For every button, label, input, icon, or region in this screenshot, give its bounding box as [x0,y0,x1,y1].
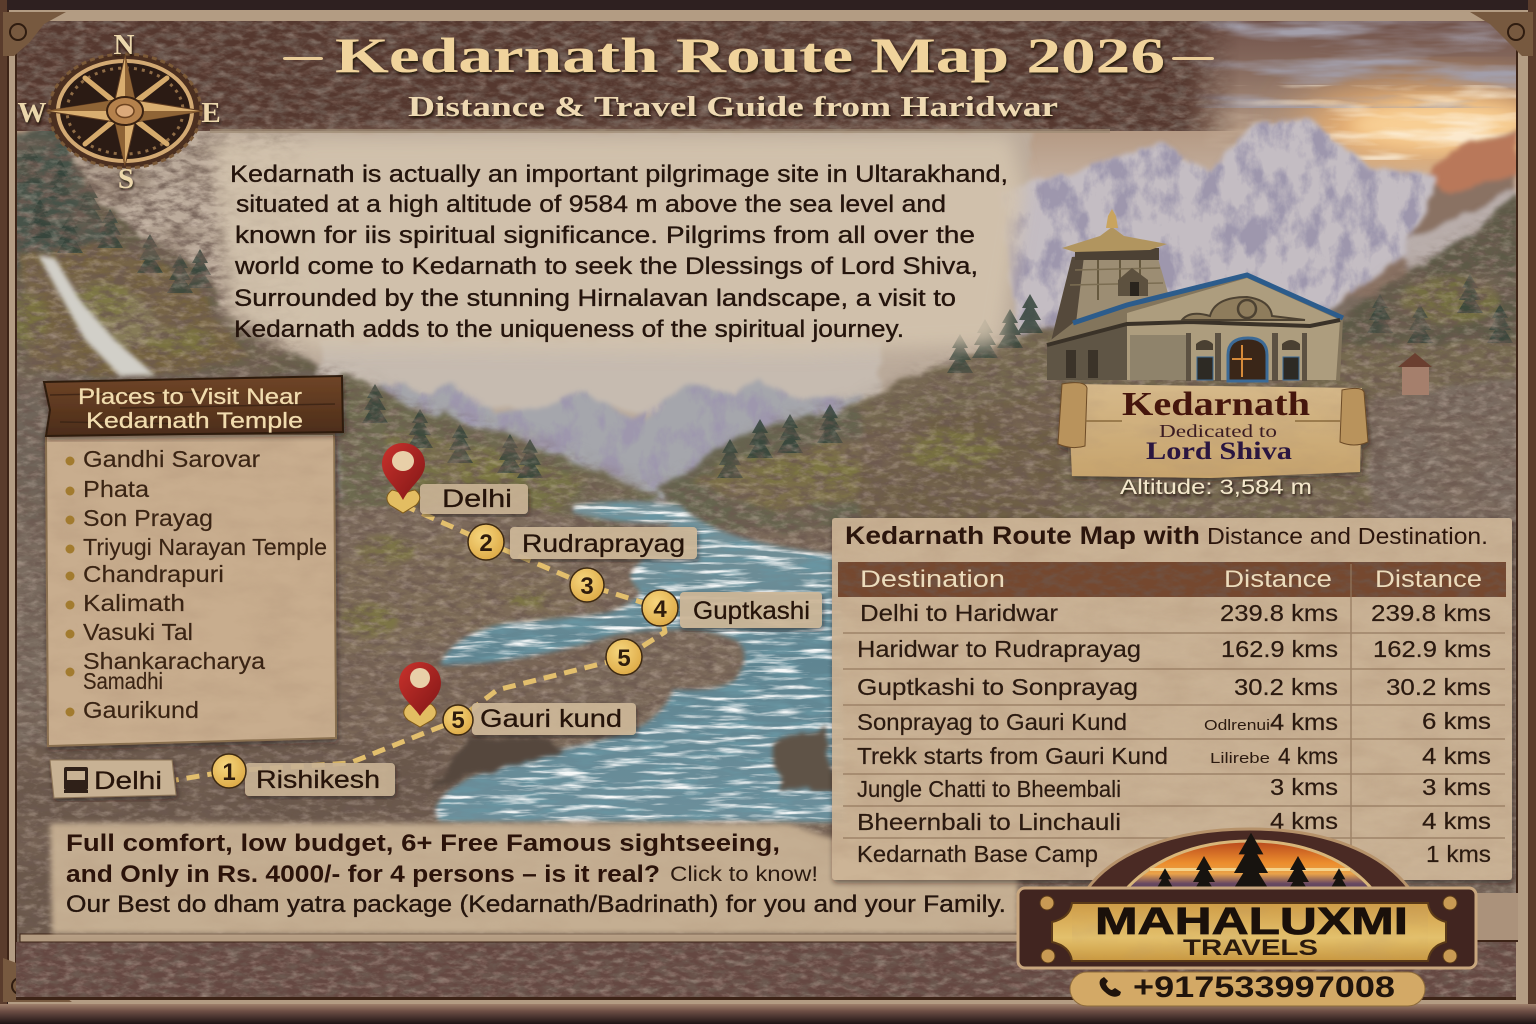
pale haze [0,130,1030,420]
table header row [838,562,1506,597]
left dark forest [17,147,320,416]
table rows: Lilirebe [1210,750,1270,767]
text block: intro paragraph: world come to Kedarnath to seek the Dlessings of Lord Shiva, [234,253,978,280]
compass letters: S [118,163,134,195]
banner: Kedarnath scroll: Lord Shiva [1146,438,1293,465]
table rows: Bheernbali to Linchauli [857,809,1121,835]
panel: promotional text: Click to know! [670,863,818,886]
table heading: Kedarnath Route Map with [845,522,1200,550]
table rows: 4 kms [1270,709,1338,735]
compass letters: E [201,97,221,129]
route stop markers: 1 [222,759,236,786]
map label: Guptkashi: Guptkashi [693,597,810,625]
icon: red map pin Gaurikund [399,662,441,727]
bank [338,510,831,560]
table rows: 3 kms [1270,774,1338,800]
river [420,495,850,830]
land texture [14,130,1522,950]
list items: Chandrapuri [83,561,224,587]
panel: places to visit list [46,434,336,746]
phone pill [1070,971,1425,1006]
map label: Guptkashi [680,592,822,628]
map label: Gauri kund [472,703,636,735]
list items: Vasuki Tal [83,619,193,645]
route line [176,505,665,780]
logo plaque: MAHALUXMI [1095,901,1408,943]
table rows: 1 kms [1426,841,1491,867]
table rows: 30.2 kms [1234,674,1338,700]
table rows: 4 kms [1422,743,1491,769]
panel: promotional text: and Only in Rs. 4000/- for 4 persons – is it real? [66,861,660,888]
subtitle: Distance & Travel Guide from Haridwar [408,92,1058,123]
table rows: Odlrenui [1204,717,1270,734]
table rows: Jungle Chatti to Bheembali [857,776,1121,802]
text block: intro paragraph: Surrounded by the stunning Hirnalavan landscape, a visit to [234,285,956,312]
icon: red map pin Delhi [382,443,425,513]
table header row: Distance [1224,566,1332,593]
table rows: Haridwar to Rudraprayag [857,636,1141,662]
table rows: 4 kms [1270,808,1338,834]
river rocks [430,722,835,790]
heading: places sign [44,376,343,436]
phone pill: +917533997008 [1133,971,1395,1004]
table heading: Distance and Destination. [1207,523,1488,549]
table rows [857,600,1491,867]
icon: telephone [1100,977,1121,997]
title: Kedarnath Route Map 2026 [335,27,1165,83]
list items: Son Prayag [83,505,213,531]
banner: Kedarnath scroll: Kedarnath [1122,386,1310,423]
banner: Kedarnath scroll [1058,383,1368,478]
route stop markers: 3 [580,573,594,600]
right ridges [1345,128,1516,298]
top band: rocky header [14,18,1239,131]
logo: Mahaluxmi Travels [1018,829,1476,1006]
table rows: 162.9 kms [1373,636,1491,662]
heading: places sign: Kedarnath Temple [86,408,303,433]
ground below temple [830,330,1520,530]
route stop markers: 5 [451,707,465,734]
map label: Delhi start [50,760,176,798]
table rows: Guptkashi to Sonprayag [857,674,1138,700]
map label: Delhi start: Delhi [94,767,162,795]
table header row: Distance [1375,566,1482,593]
map label: Rudraprayag: Rudraprayag [522,530,685,558]
list items: Triyugi Narayan Temple [83,534,327,560]
panel: promotional text: Full comfort, low budget, 6+ Free Famous sightseeing, [66,830,780,857]
text block: intro paragraph: Kedarnath adds to the uniqueness of the spiritual journey. [234,316,904,343]
map label: Gauri kund: Gauri kund [480,705,622,733]
list items [66,446,327,723]
route stop markers [212,524,678,788]
map label: Rudraprayag [510,527,697,559]
panel: promotional text [50,823,1018,934]
list items: Samadhi [83,668,163,694]
compass letters [18,29,221,195]
panel: intro text parchment [210,129,1110,352]
table rows: 30.2 kms [1386,674,1491,700]
text block: intro paragraph: situated at a high altitude of 9584 m above the sea level and [236,191,946,218]
map label: Delhi: Delhi [442,485,512,513]
table rows: 162.9 kms [1221,636,1338,662]
olive patches [12,276,1500,636]
list items: Gaurikund [83,697,199,723]
table rows: Kedarnath Base Camp [857,841,1098,867]
title [283,27,1214,83]
compass letters: N [114,29,135,61]
logo arch [1084,829,1413,899]
illustration: Kedarnath temple [1047,209,1343,381]
table grid [843,564,1505,860]
list items: Phata [83,476,149,502]
route stop markers: 5 [617,645,631,672]
altitude caption: Altitude: 3,584 m [1120,476,1312,499]
bottom band [16,893,1518,1000]
list items: Kalimath [83,590,185,616]
icon: compass rose [18,29,221,195]
logo plaque [1018,888,1476,968]
map label: Delhi [420,484,528,514]
right slope [655,407,860,540]
table rows: Trekk starts from Gauri Kund [857,743,1168,769]
table rows: Sonprayag to Gauri Kund [857,709,1127,735]
route stop markers: 4 [653,596,667,623]
table rows: 4 kms [1278,743,1338,769]
table rows: 6 kms [1422,708,1491,734]
panel: promotional text: Our Best do dham yatra package (Kedarnath/Badrinath) for you and your Family. [66,891,1006,918]
table header row: Destination [860,566,1005,593]
sunset sky [14,18,1536,208]
panel: route distance table [832,518,1512,880]
list items: Gandhi Sarovar [83,446,260,472]
centre sky [320,340,880,410]
far peaks [340,380,860,500]
logo plaque: TRAVELS [1183,935,1318,960]
heading: places sign: Places to Visit Near [78,384,302,409]
banner: Kedarnath scroll: Dedicated to [1159,421,1277,441]
table rows: 3 kms [1422,774,1491,800]
table rows: 4 kms [1422,808,1491,834]
left slope [337,371,662,526]
text block: intro paragraph [230,161,1008,343]
compass letters: W [18,97,46,129]
table rows: Delhi to Haridwar [860,600,1058,626]
text block: intro paragraph: Kedarnath is actually an important pilgrimage site in Ultarakhand, [230,161,1008,188]
table heading [845,522,1488,550]
table rows: 239.8 kms [1371,600,1491,626]
list items: Shankaracharya [83,648,265,674]
trees [17,144,1513,478]
route stop markers: 2 [479,530,493,557]
text block: intro paragraph: known for iis spiritual significance. Pilgrims from all over the [235,222,975,249]
waterfall [38,255,155,376]
illustration: small shrine [1398,353,1432,395]
map label: Rishikesh [245,763,395,796]
table rows: 239.8 kms [1220,600,1338,626]
icon: bus [64,767,88,793]
mountain rock streaks [1008,118,1426,334]
map label: Rishikesh: Rishikesh [256,766,380,794]
